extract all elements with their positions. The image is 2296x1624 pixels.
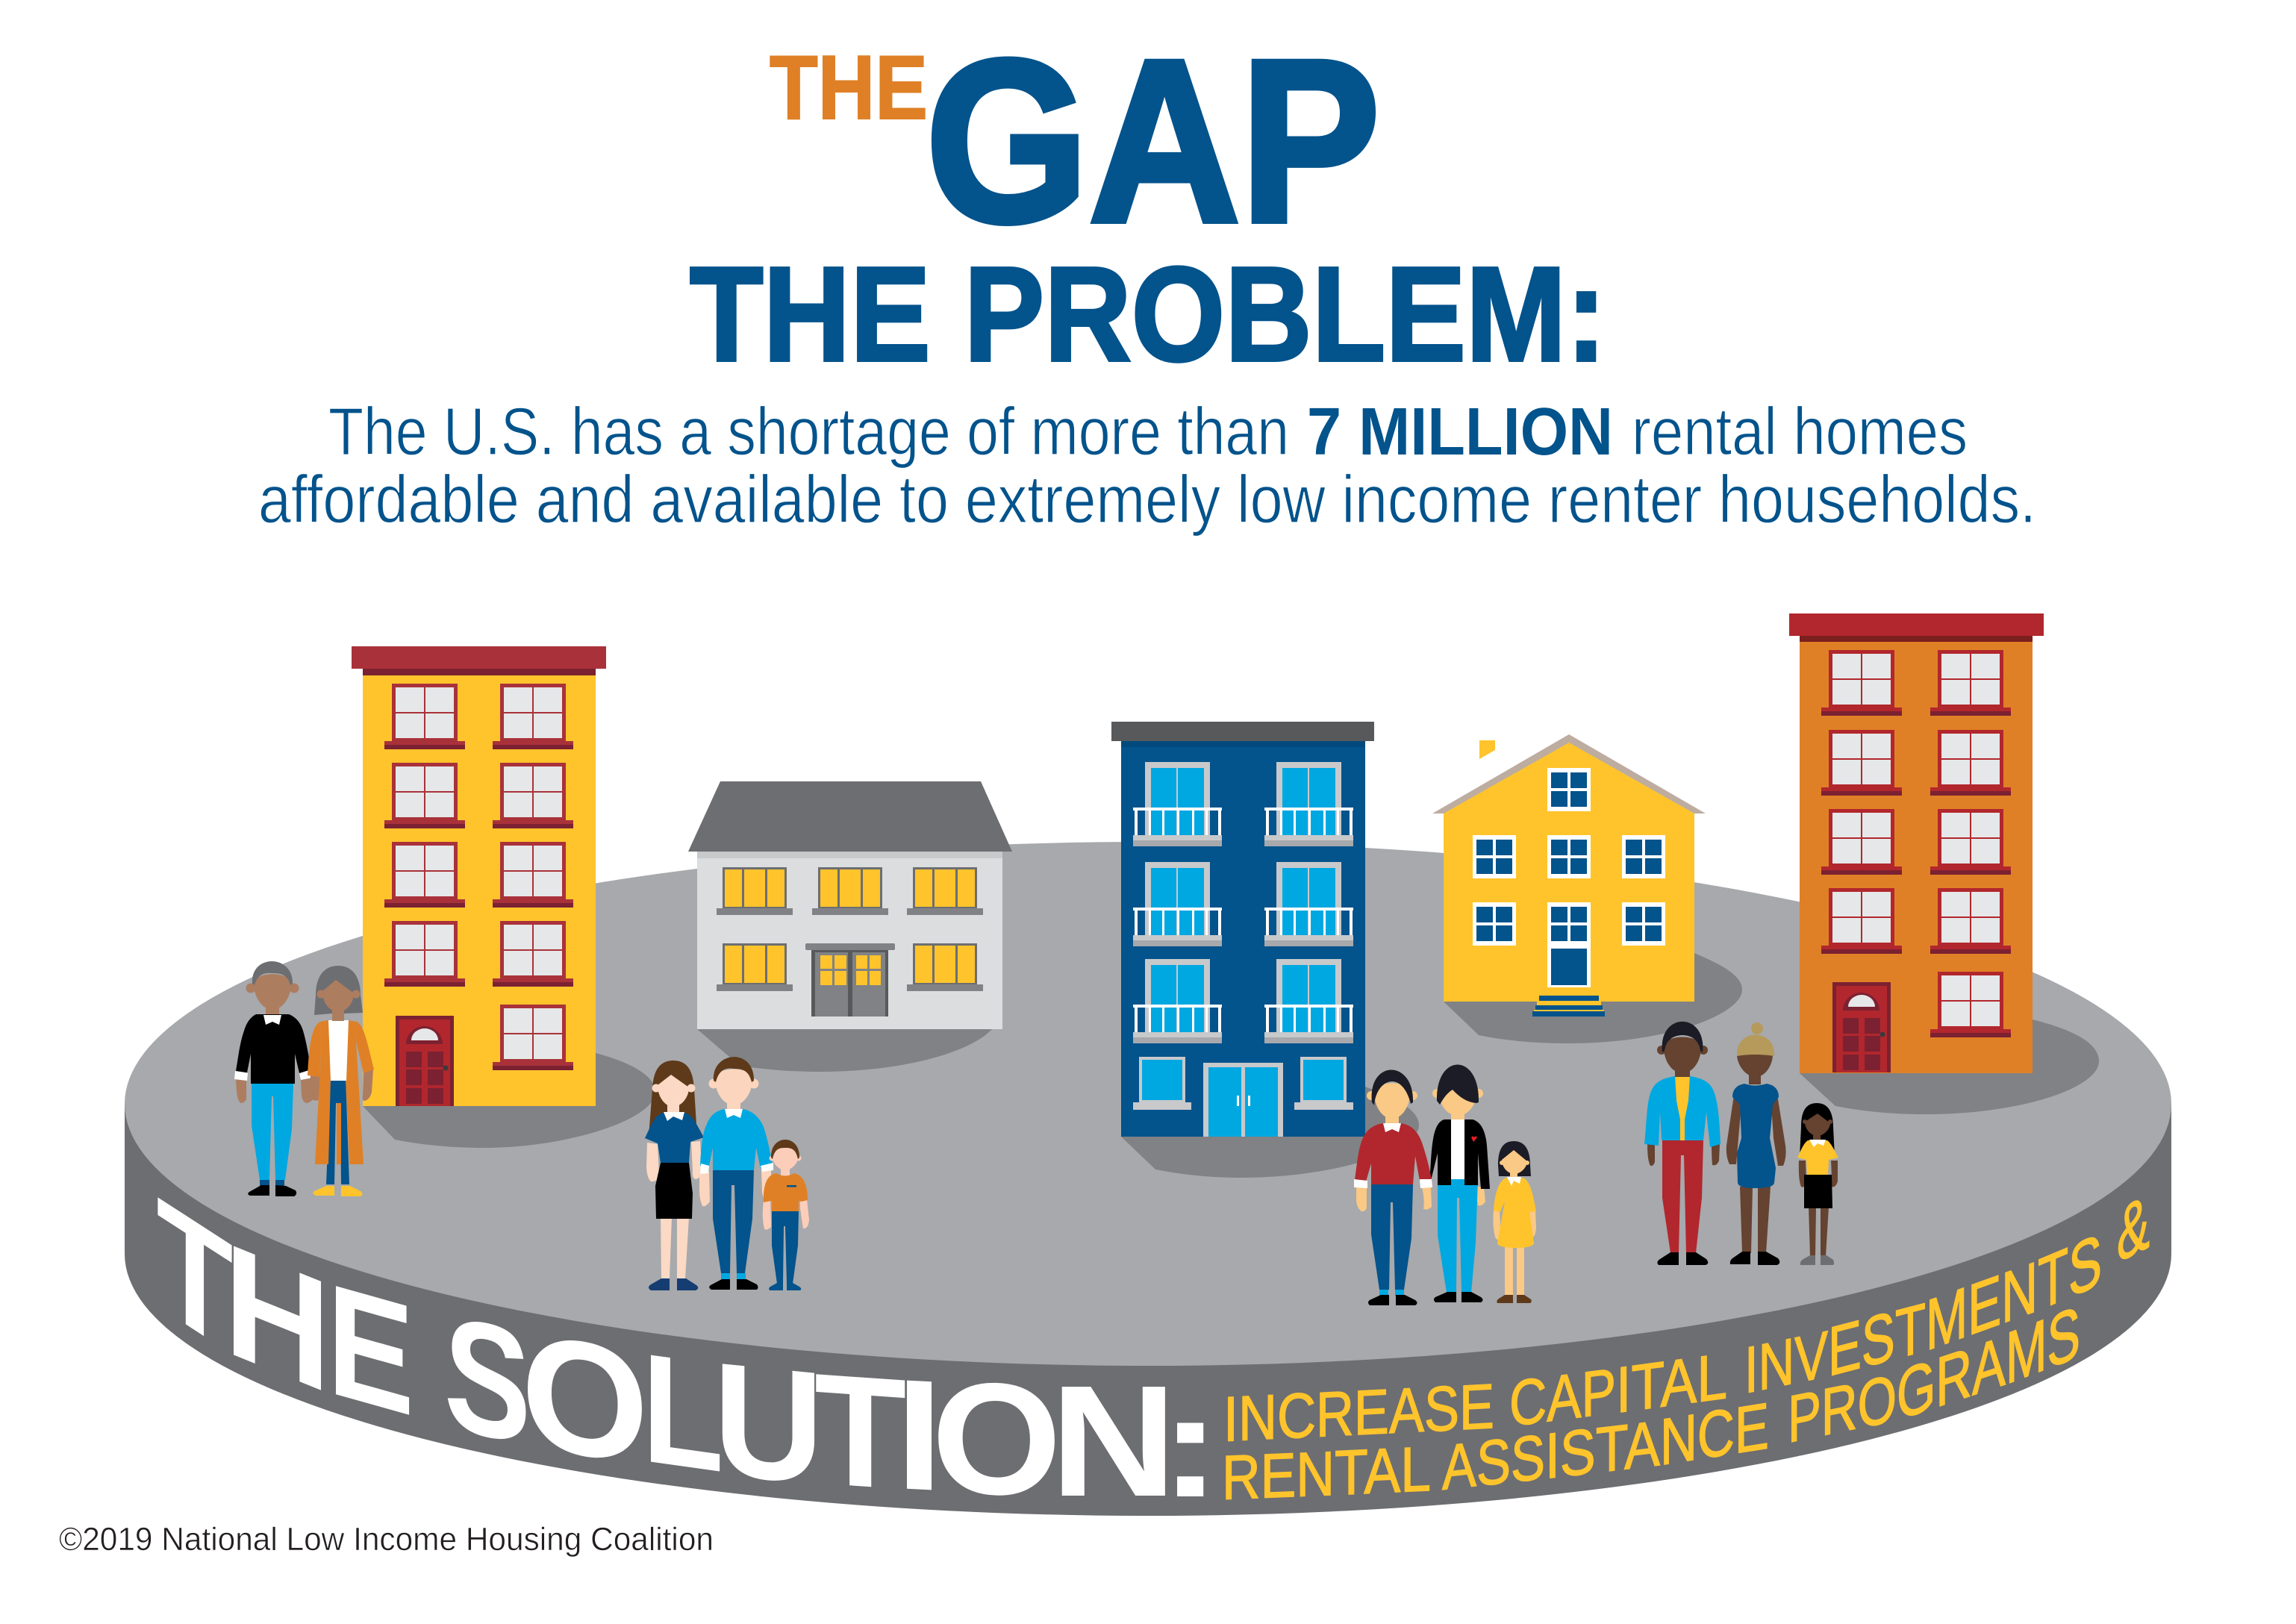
front door <box>1547 902 1591 987</box>
first line: increase capital investments and: TS <box>2038 1217 2102 1326</box>
family 4: parents with daughter <box>1644 1022 1838 1265</box>
title word: GAP: GAP <box>926 11 1380 270</box>
second line: rental assistance programs: PRO <box>1788 1361 1897 1458</box>
woman in blue dress <box>1726 1022 1786 1265</box>
steps <box>1532 996 1605 1016</box>
first line: increase capital investments and: CAP <box>1509 1355 1616 1440</box>
door <box>396 1016 454 1106</box>
building: gray house <box>688 781 1012 1029</box>
problem statement text: The U.S. has a shortage of more than <box>328 395 1289 469</box>
first line: increase capital investments and: INC <box>1223 1379 1316 1455</box>
woman in orange coat <box>308 966 374 1196</box>
first line: increase capital investments and: EST <box>1828 1288 1926 1391</box>
second line: rental assistance programs <box>1222 1290 2080 1513</box>
woman in navy blouse <box>645 1061 704 1290</box>
heading: The Solution, warped along the disc edge: T <box>157 1162 233 1389</box>
heading: The Solution, warped along the disc edge: : <box>1159 1364 1221 1528</box>
title: The Gap <box>770 11 1380 270</box>
building: yellow house <box>1432 734 1706 1016</box>
copyright line: ©2019 National Low Income Housing Coalition <box>59 1521 714 1558</box>
first line: increase capital investments and: ITAL <box>1616 1340 1727 1426</box>
girl in yellow dress <box>1493 1141 1536 1303</box>
man in cyan jacket <box>1644 1022 1721 1265</box>
door <box>1832 982 1891 1072</box>
first line: increase capital investments and: REA <box>1316 1374 1424 1450</box>
first line: increase capital investments and <box>1223 1178 2150 1455</box>
heading: The Solution, warped along the disc edge: O <box>932 1349 1061 1530</box>
second line: rental assistance programs: MS <box>2006 1290 2080 1400</box>
building: orange apartment tower <box>1789 613 2044 1073</box>
building: yellow apartment tower <box>352 646 606 1106</box>
family 3: parents with daughter <box>1354 1064 1536 1305</box>
man in red sweater <box>1354 1070 1432 1305</box>
heading: The Solution, warped along the disc edge: U <box>714 1328 824 1519</box>
heading: The Solution, warped along the disc edge: S <box>444 1281 531 1480</box>
heading: The Solution, warped along the disc edge <box>157 1162 1221 1530</box>
first line: increase capital investments and: INV <box>1744 1317 1828 1408</box>
family 1: older couple <box>234 961 374 1196</box>
building shadows on the disc <box>363 953 2099 1178</box>
second line: rental assistance programs: GRA <box>1897 1322 2006 1436</box>
roof <box>1432 734 1706 813</box>
roof <box>352 646 606 669</box>
roof <box>1111 722 1374 741</box>
heading: The Solution, warped along the disc edge: T <box>814 1340 906 1523</box>
heading: The Solution, warped along the disc edge: E <box>327 1249 414 1450</box>
heading: The Solution, warped along the disc edge: N <box>1050 1353 1177 1529</box>
family 2: parents with son <box>645 1057 809 1290</box>
first line: increase capital investments and: & <box>2117 1178 2150 1279</box>
boy in orange shirt <box>763 1140 809 1290</box>
first line: increase capital investments and: SE <box>1424 1370 1494 1445</box>
second line: rental assistance programs: NCE <box>1660 1389 1769 1479</box>
platform disc <box>125 842 2171 1516</box>
man in black jacket <box>1429 1064 1490 1302</box>
problem statement text <box>258 395 2036 537</box>
problem statement text: rental homes <box>1632 395 1968 469</box>
roof <box>1789 613 2044 636</box>
second line: rental assistance programs: TAL <box>1335 1433 1431 1508</box>
heading: The Solution, warped along the disc edge: L <box>642 1320 724 1505</box>
door <box>805 943 895 1016</box>
title word: THE: THE <box>770 37 928 138</box>
heading: The Problem: THE PROBLEM: <box>690 240 1606 390</box>
first line: increase capital investments and: MEN <box>1926 1246 2038 1367</box>
heading: The Solution, warped along the disc edge: O <box>521 1297 649 1501</box>
second line: rental assistance programs: REN <box>1222 1438 1335 1513</box>
heading: The Solution, warped along the disc edge: I <box>896 1346 943 1524</box>
problem statement text: 7 MILLION <box>1307 395 1613 469</box>
man in black sweater <box>234 961 313 1196</box>
girl in yellow blouse <box>1797 1103 1838 1265</box>
door <box>1203 1063 1283 1137</box>
heading: The Solution, warped along the disc edge: H <box>224 1208 331 1428</box>
second line: rental assistance programs: ASS <box>1442 1421 1545 1503</box>
roof <box>688 781 1012 852</box>
chimney <box>1479 740 1495 759</box>
problem statement text: affordable and available to extremely low income renter households. <box>258 463 2036 537</box>
solution detail text, warped along the disc edge <box>1222 1178 2150 1513</box>
second line: rental assistance programs: ISTA <box>1545 1407 1660 1492</box>
man in cyan sweater <box>699 1057 773 1290</box>
building: blue apartment tower <box>1111 722 1374 1137</box>
